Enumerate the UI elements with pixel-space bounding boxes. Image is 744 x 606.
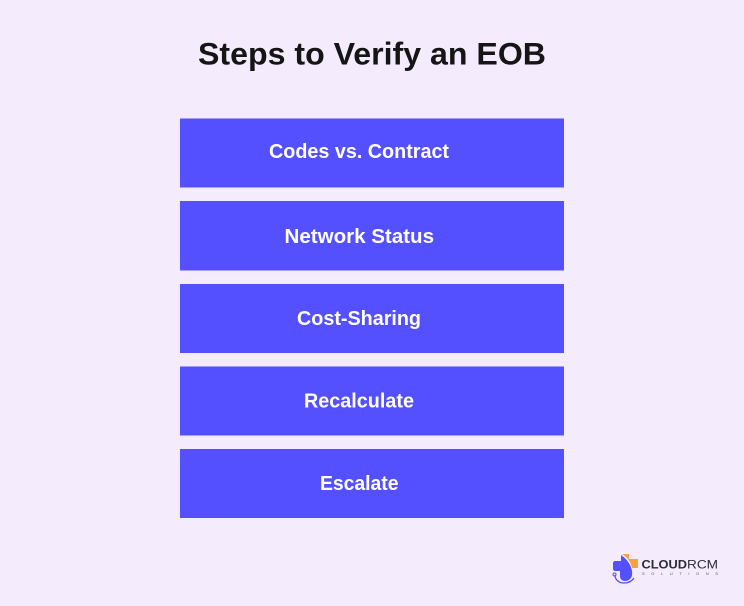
step 4: Recalculate: Recalculate — [304, 390, 414, 412]
icon: medical cross with stethoscope — [613, 554, 638, 583]
step 2: Network Status — [180, 201, 564, 270]
step 4: Recalculate — [180, 366, 564, 436]
title: Steps to Verify an EOB — [198, 36, 546, 72]
step 5: Escalate: Escalate — [320, 473, 398, 495]
step 2: Network Status: Network Status — [284, 226, 434, 248]
logo: CloudRCM Solutions — [613, 554, 718, 583]
logo: CloudRCM Solutions: RCM — [687, 558, 718, 572]
step 1: Codes vs. Contract — [180, 118, 564, 188]
step 5: Escalate — [180, 449, 564, 518]
step 3: Cost-Sharing — [180, 284, 564, 353]
wordmark: CLOUD — [642, 558, 687, 572]
step 1: Codes vs. Contract: Codes vs. Contract — [269, 141, 449, 163]
step 3: Cost-Sharing: Cost-Sharing — [297, 308, 421, 330]
tagline: SOLUTIONS — [642, 571, 718, 576]
